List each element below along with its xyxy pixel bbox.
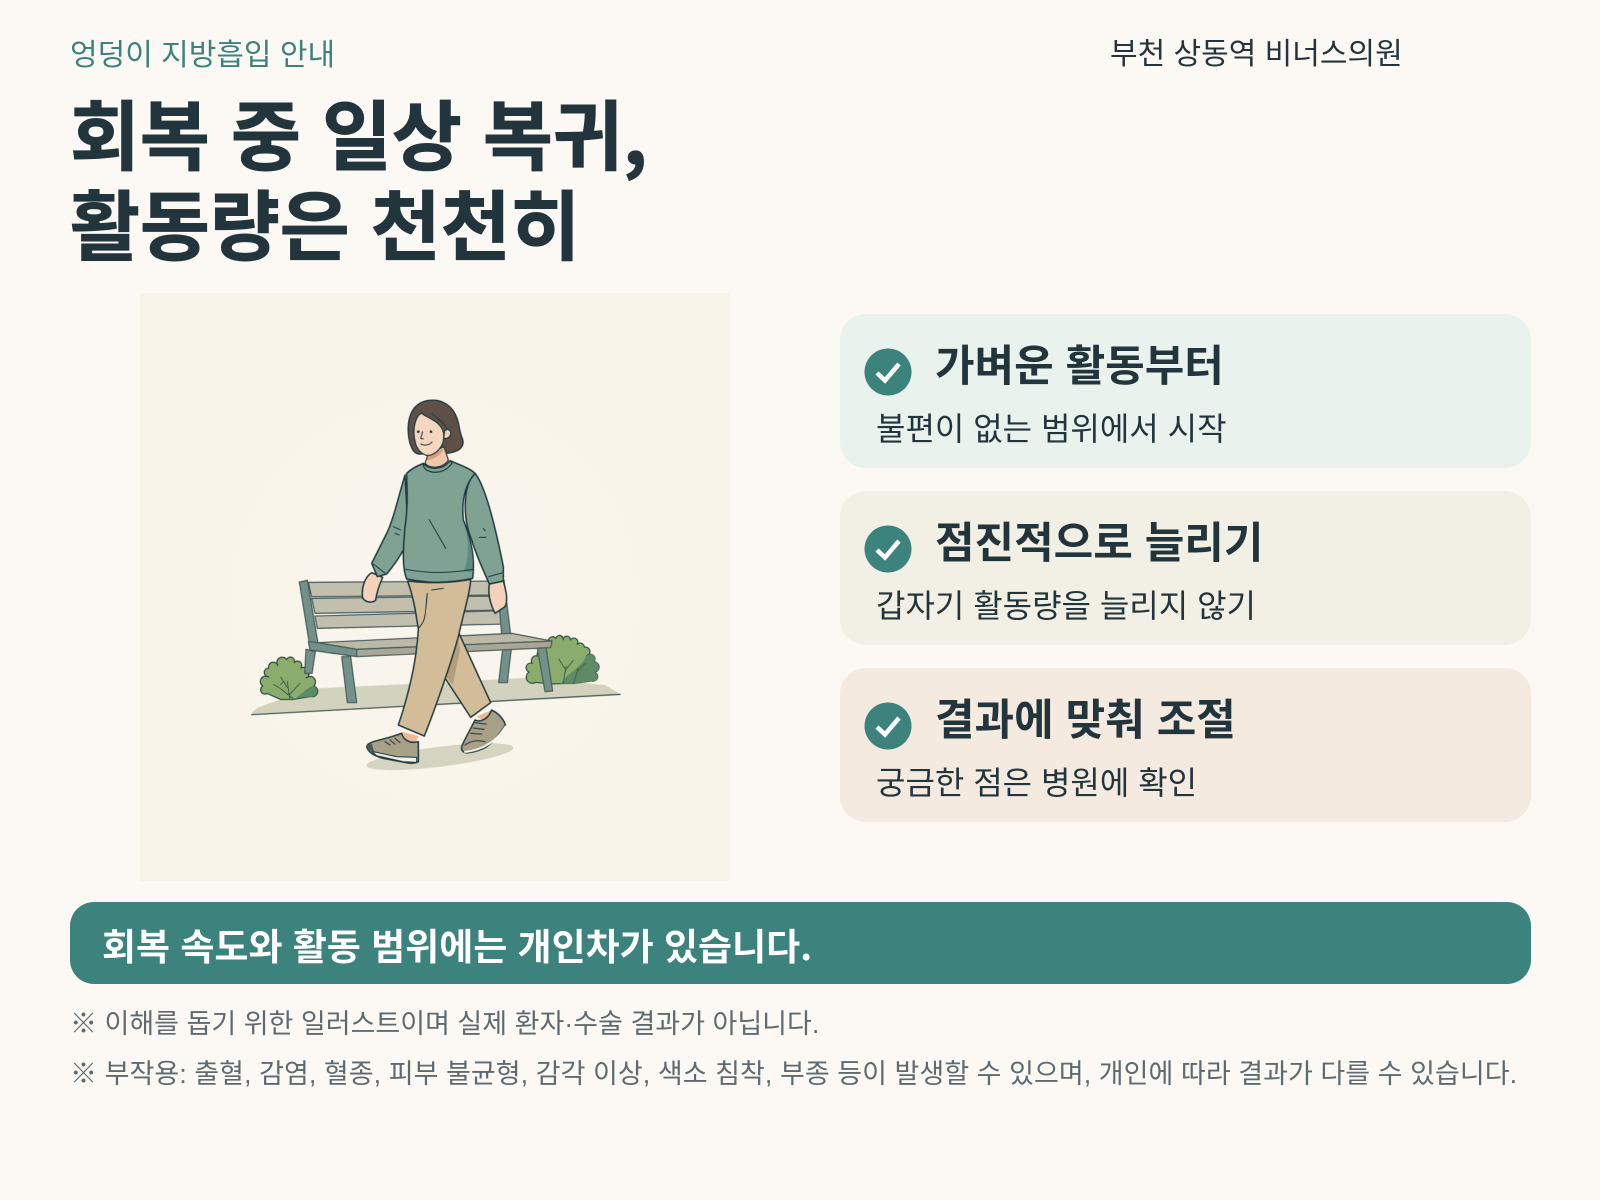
card text: 불편이 없는 범위에서 시작	[876, 411, 1227, 447]
bench left post	[299, 580, 318, 643]
footnote 2: ※ 부작용: 출혈, 감염, 혈종, 피부 불균형, 감각 이상, 색소 침착, 부종 등이 발생할 수 있으며, 개인에 따라 결과가 다를 수 있습니다.	[70, 1059, 1517, 1089]
icon: check	[864, 526, 912, 572]
left hand	[362, 573, 383, 602]
eyebrow label: 엉덩이 지방흡입 안내	[70, 39, 335, 72]
bench seat	[317, 633, 552, 649]
front shoe	[367, 732, 418, 763]
footnote 1: ※ 이해를 돕기 위한 일러스트이며 실제 환자·수술 결과가 아닙니다.	[70, 1009, 819, 1039]
hair strand	[432, 413, 447, 428]
card text: 갑자기 활동량을 늘리지 않기	[876, 588, 1256, 624]
bench back legs	[305, 648, 511, 683]
back shoe	[461, 710, 505, 753]
front leg	[398, 579, 471, 736]
right arm	[465, 473, 503, 584]
card: adjust to results	[840, 668, 1531, 822]
ground	[252, 678, 620, 715]
card: light activity	[840, 314, 1531, 468]
hair back	[408, 400, 463, 454]
right hand	[489, 581, 507, 613]
bench front legs	[342, 648, 553, 703]
back leg	[439, 628, 491, 717]
card heading: 결과에 맞춰 조절	[935, 697, 1236, 745]
title: 활동량은 천천히	[70, 186, 581, 271]
facial features	[417, 430, 432, 445]
card heading: 가벼운 활동부터	[935, 343, 1224, 391]
neck	[425, 447, 448, 467]
icon: check	[864, 702, 912, 750]
face	[414, 413, 444, 455]
bench back slats	[308, 581, 505, 628]
bush left	[260, 657, 318, 699]
card heading: 점진적으로 늘리기	[935, 520, 1263, 568]
illustration: woman walking past a bench	[140, 293, 730, 881]
ear	[444, 430, 451, 438]
bush right	[526, 635, 599, 684]
title	[70, 76, 648, 271]
bench right post	[497, 580, 511, 635]
bench	[299, 580, 553, 703]
clinic name: 부천 상동역 비너스의원	[1110, 38, 1403, 71]
left arm	[372, 475, 408, 577]
banner	[70, 902, 1531, 984]
card text: 궁금한 점은 병원에 확인	[876, 765, 1197, 801]
walking shadow	[365, 738, 515, 776]
banner: 회복 속도와 활동 범위에는 개인차가 있습니다.	[102, 917, 812, 971]
woman	[362, 400, 507, 763]
icon: check	[864, 348, 912, 396]
torso	[403, 461, 475, 582]
card: gradual increase	[840, 491, 1531, 645]
collar	[423, 461, 452, 472]
title: 회복 중 일상 복귀,	[70, 76, 648, 186]
